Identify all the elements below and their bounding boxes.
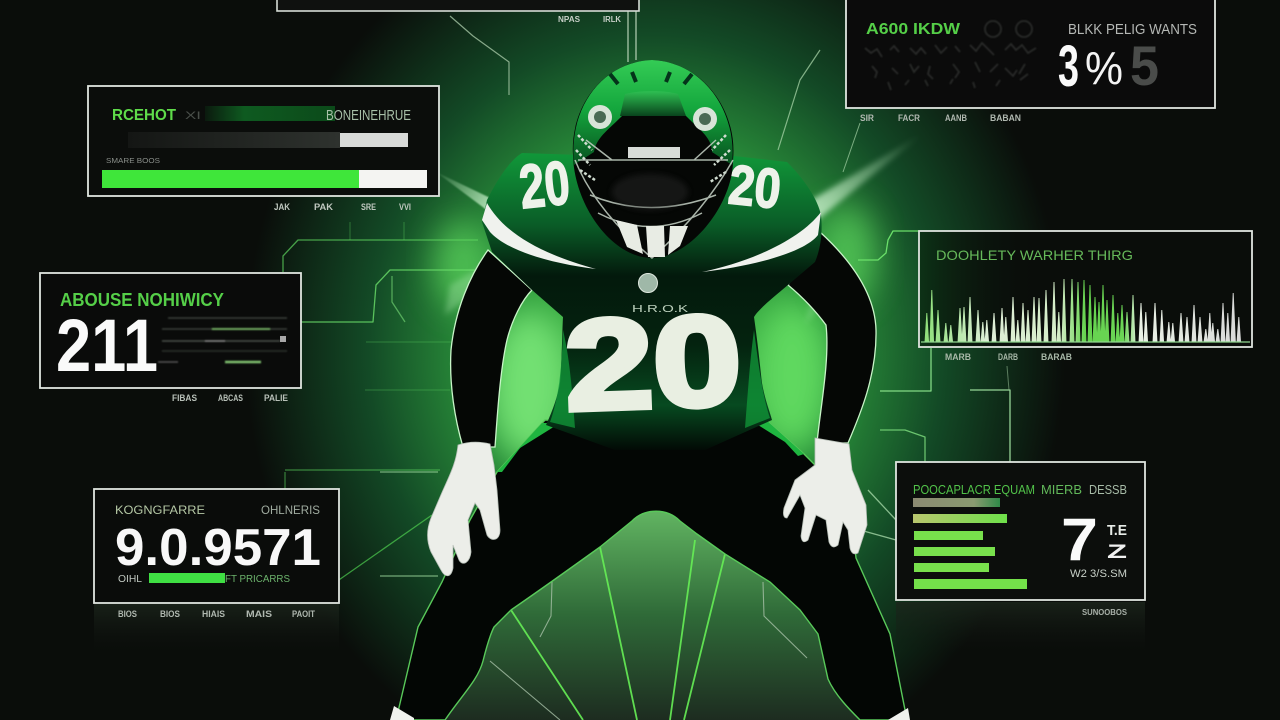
- mottled helmet sides: [576, 135, 730, 182]
- panel: 9.0.9571 stat (bottom left): OHLNERIS: [261, 503, 320, 517]
- axis labels: spike chart: DARB: [998, 352, 1018, 362]
- axis labels: top right panel: SIR: [860, 113, 874, 123]
- axis labels: top left panel: PAK: [314, 202, 334, 212]
- legs: [394, 420, 907, 720]
- jersey small text: H.R.O.K: [632, 304, 688, 315]
- panel: horizontal bars (bottom right): W2 3/S.SM: [1070, 568, 1127, 580]
- axis labels: mid left panel: PALIE: [264, 393, 288, 403]
- axis labels: top right panel: AANB: [945, 113, 967, 123]
- panel: horizontal bars (bottom right): MIERB: [1041, 482, 1082, 497]
- panel: 9.0.9571 stat (bottom left): OIHL: [118, 574, 142, 585]
- collar logo: [638, 274, 658, 292]
- panel: 211 stat (mid left): ABOUSE NOHIWICY: [60, 290, 224, 310]
- axis labels: top left panel: SRE: [361, 202, 376, 212]
- reflection: bottom left panel: HIAIS: [202, 609, 225, 619]
- panel: spike chart (right): DOOHLETY WARHER THIRG: [936, 247, 1133, 263]
- axis labels: mid left panel: [172, 393, 288, 403]
- panel: spike chart (right): [919, 231, 1252, 347]
- arm left: [451, 250, 532, 447]
- panel: top centre (cropped): IRLK: [603, 15, 621, 24]
- axis labels: top right panel: BABAN: [990, 113, 1021, 123]
- glove left: [428, 442, 500, 576]
- axis labels: spike chart: [945, 352, 1072, 362]
- axis labels: spike chart: MARB: [945, 352, 971, 362]
- stat glyphs: 3: [1058, 34, 1079, 99]
- panel: horizontal bars (bottom right): T.E: [1107, 522, 1127, 539]
- axis labels: top left panel: VVI: [399, 202, 411, 212]
- dim pattern: [865, 21, 1036, 90]
- axis labels: top left panel: [274, 202, 411, 212]
- arm right: [788, 232, 876, 443]
- panel: horizontal bars (bottom right): POOCAPLACR EQUAM: [913, 482, 1035, 497]
- jersey side highlights: [550, 330, 770, 428]
- reflection: bottom left panel: PAOIT: [292, 609, 315, 619]
- panel: horizontal bars (bottom right): DESSB: [1089, 482, 1127, 497]
- glove right: [783, 438, 867, 554]
- reflection: bottom left panel: MAIS: [246, 609, 272, 619]
- panel heading: RCEHOT: [112, 107, 176, 124]
- spikes: [925, 279, 1241, 342]
- axis labels: top left panel: JAK: [274, 202, 290, 212]
- big number: 9.0.9571: [115, 519, 321, 577]
- light rays: [436, 132, 925, 325]
- panel: horizontal bars (bottom right): [896, 462, 1145, 600]
- panel: 211 stat (mid left): [40, 273, 301, 388]
- axis labels: top right panel: FACR: [898, 113, 920, 123]
- progress bar: [102, 170, 359, 188]
- socks: [390, 706, 910, 720]
- axis labels: top right panel: [860, 113, 1021, 123]
- panel: recent bars (top left): SMARE BOOS: [106, 158, 160, 165]
- player: [390, 60, 910, 720]
- panel: recent bars (top left): BONEINEHRUE: [326, 107, 411, 124]
- vents: [610, 72, 692, 84]
- mini bars: [158, 318, 287, 362]
- sleeve numbers: 20: [516, 149, 573, 222]
- shell: [573, 60, 733, 165]
- face mask: [575, 140, 733, 258]
- panel: horizontal bars (bottom right): Z: [1107, 542, 1128, 563]
- jersey: [482, 153, 822, 450]
- panel: top centre (cropped): NPAS: [558, 15, 581, 24]
- panel: percentage (top right): A600 IKDW: [866, 21, 961, 38]
- floor arch: [445, 420, 860, 720]
- big number: 7: [1061, 506, 1098, 573]
- reflection: bottom right panel: [896, 602, 1145, 652]
- reflection: bottom left panel: BIOS: [118, 609, 137, 619]
- panel: 9.0.9571 stat (bottom left): [94, 489, 339, 603]
- panel: recent bars (top left): XI: [185, 110, 201, 122]
- panel: percentage (top right): BLKK PELIG WANTS: [1068, 21, 1197, 38]
- bars: [913, 498, 1000, 507]
- crown plate: [620, 91, 686, 116]
- dark header bar: [205, 106, 335, 121]
- big number: 211: [56, 304, 158, 387]
- chin guard: [616, 220, 688, 257]
- reflection: bottom left panel: [94, 604, 339, 652]
- jersey number: 20: [563, 289, 744, 438]
- panel: recent bars (top left): [88, 86, 439, 196]
- circuit connector lines: [283, 11, 1010, 598]
- panel: 9.0.9571 stat (bottom left): KOGNGFARRE: [115, 503, 205, 517]
- panel: percentage (top right): %: [1085, 42, 1123, 94]
- player: 20: [726, 152, 784, 221]
- axis labels: mid left panel: ABCAS: [218, 393, 243, 403]
- panel: percentage (top right): 5: [1130, 34, 1159, 97]
- axis labels: mid left panel: FIBAS: [172, 393, 197, 403]
- panel: 9.0.9571 stat (bottom left): FT PRICARRS: [225, 574, 290, 585]
- panel: top centre (cropped): [277, 0, 639, 24]
- axis labels: spike chart: BARAB: [1041, 352, 1072, 362]
- hip highlights: [497, 423, 560, 472]
- helmet: [573, 60, 733, 258]
- reflection: bottom right panel: SUNOOBOS: [1082, 608, 1128, 617]
- reflection: bottom left panel: BIOS: [160, 609, 180, 619]
- shoulder swooshes: [482, 203, 596, 269]
- panel: percentage (top right): [846, 0, 1215, 108]
